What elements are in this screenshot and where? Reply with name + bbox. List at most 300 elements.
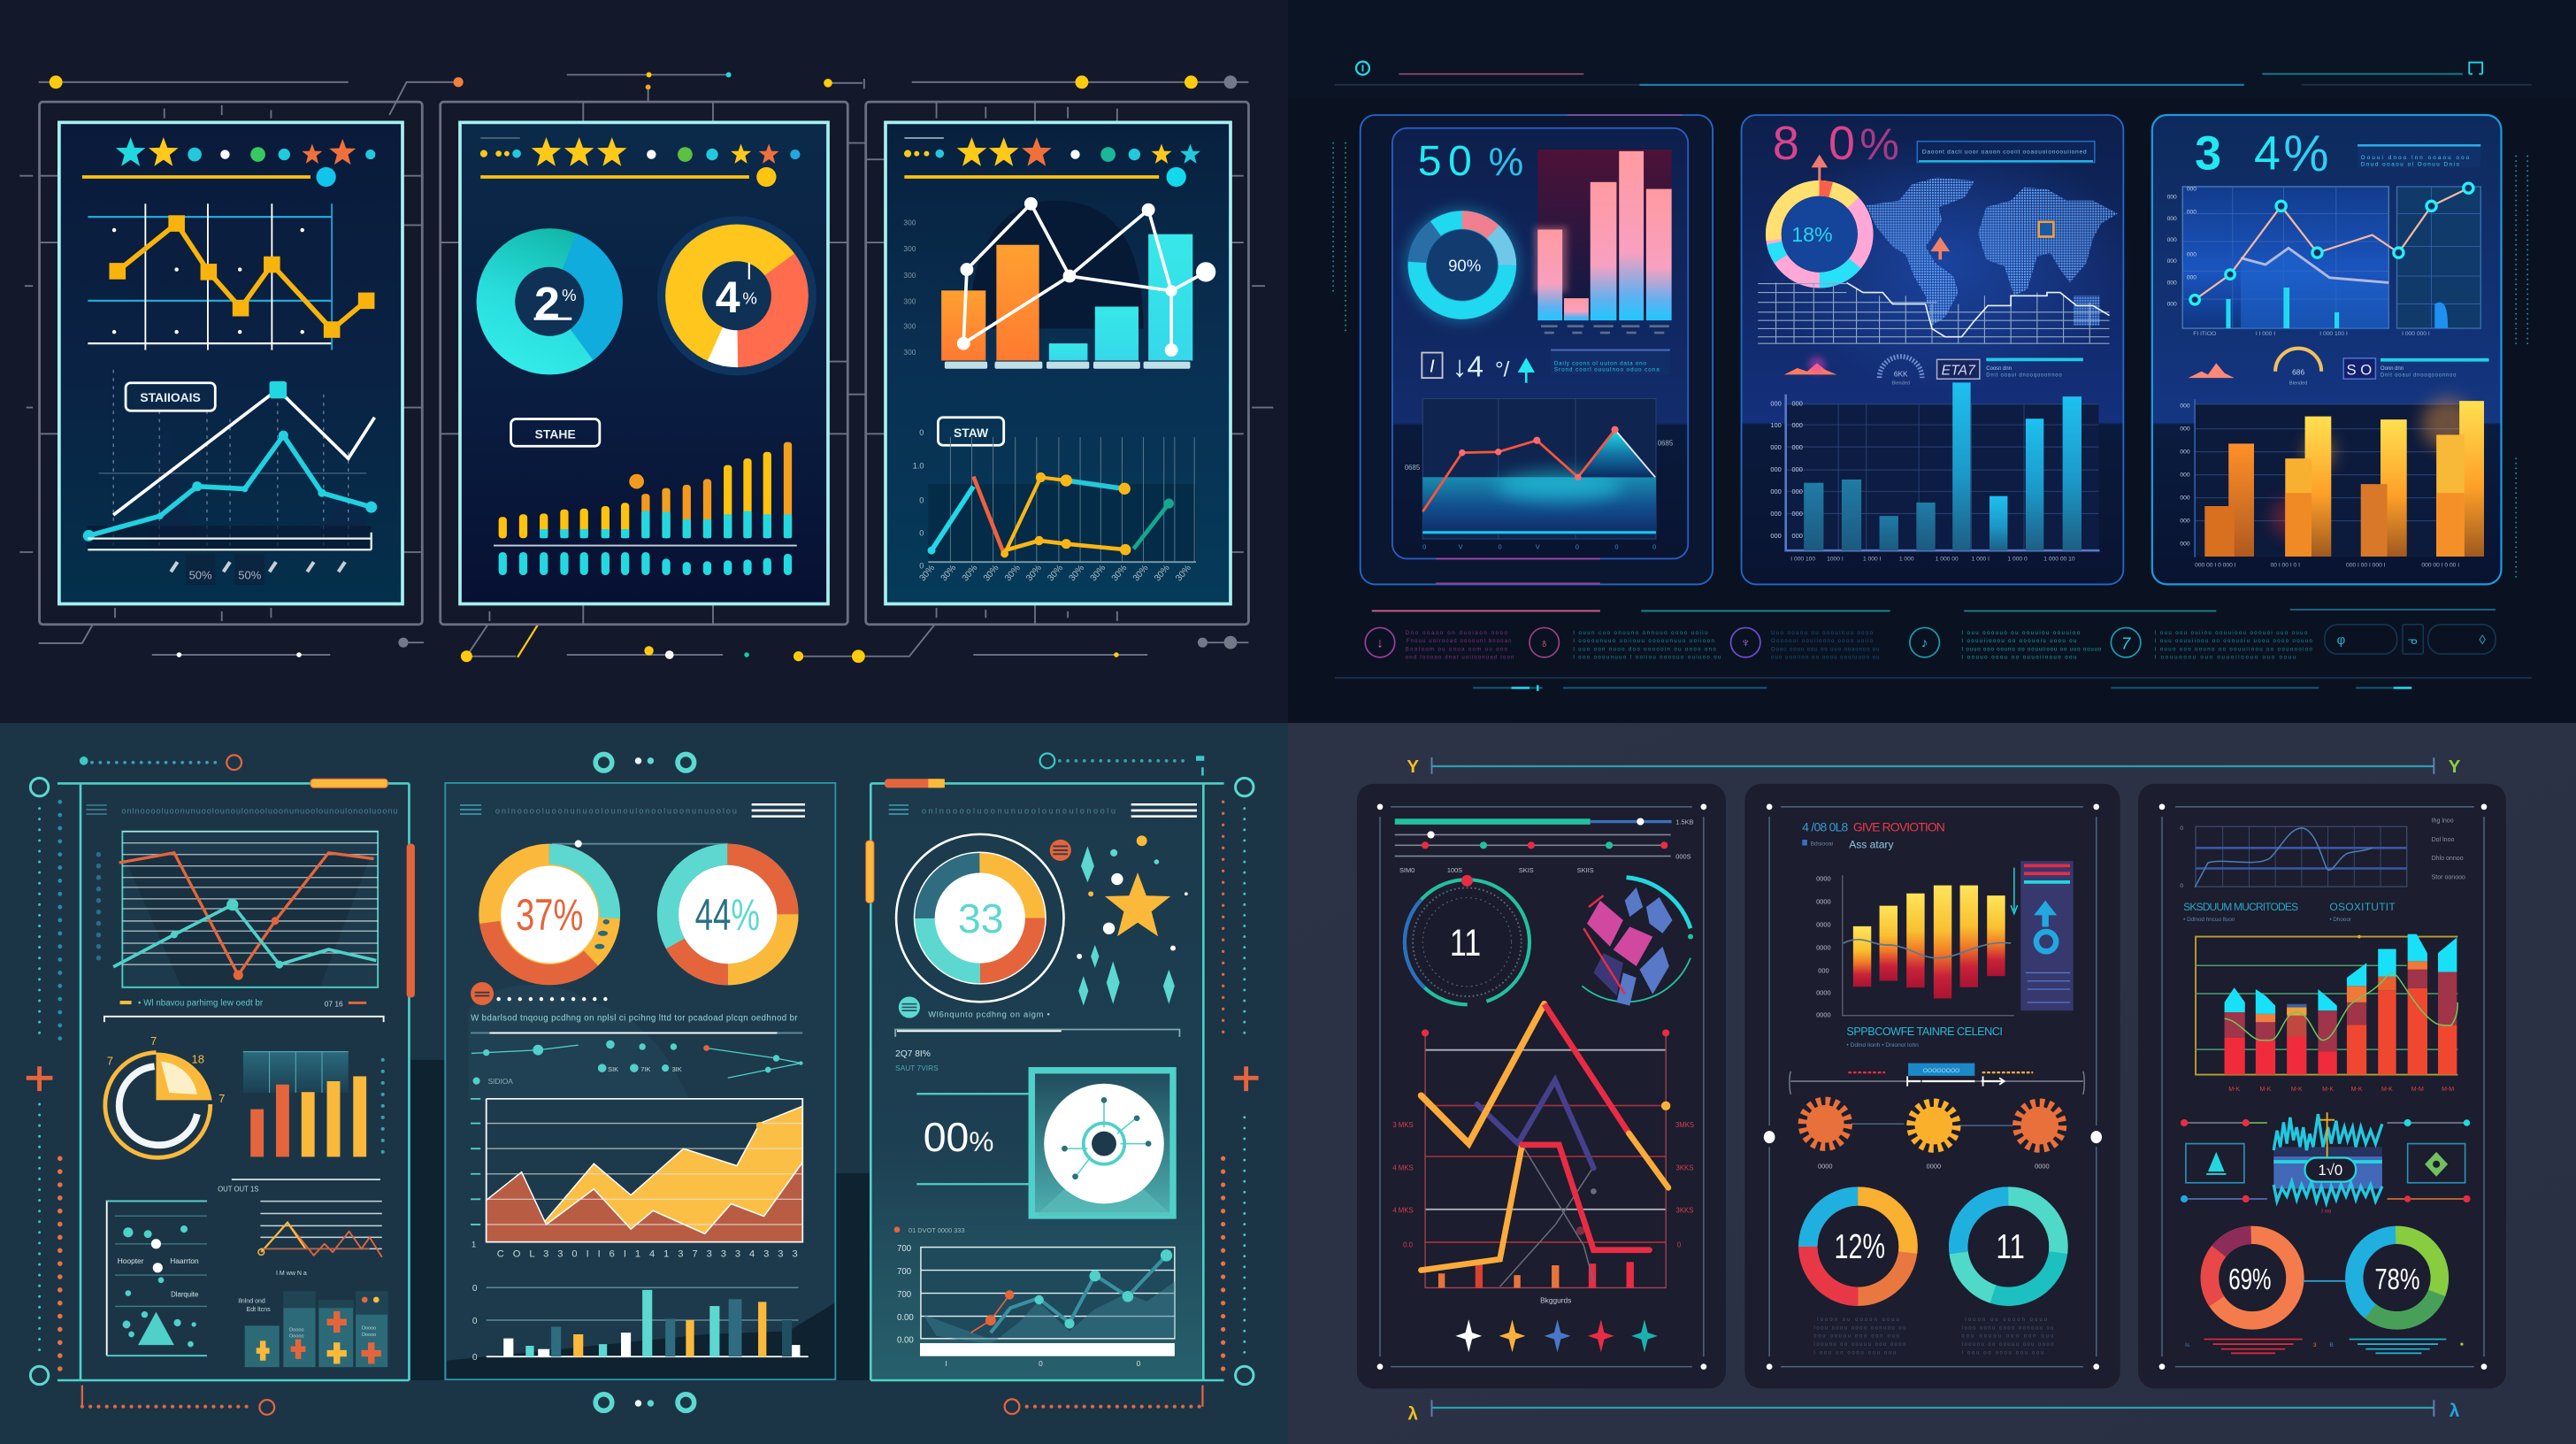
chart: donut 69% bbox=[2210, 1235, 2295, 1320]
panel: dial and big line chart bbox=[1357, 784, 1726, 1388]
title: Ass atary bbox=[1849, 838, 1893, 850]
top and bottom rules: Y bbox=[1407, 757, 1419, 777]
chart: small blue line: Ihg lnoo bbox=[2432, 818, 2454, 824]
stat captions: 2Q7 8I% bbox=[895, 1049, 931, 1059]
chart: hot bars: 0000 bbox=[1816, 943, 1831, 951]
panel: right donut, star and picture bbox=[866, 779, 1224, 1380]
chart: donut 44%: 44% bbox=[695, 890, 760, 940]
stat: 14% with arrow: °/ bbox=[1495, 357, 1510, 381]
chart: orange and yellow bars: 000 bbox=[2180, 495, 2190, 502]
stat: 00%: 00% bbox=[924, 1114, 993, 1160]
chart: red peak line: 0 bbox=[1422, 542, 1426, 550]
buttons: ◊ bbox=[2479, 634, 2486, 648]
chart: glowing node line: 000 bbox=[2187, 252, 2196, 258]
caption with icon bbox=[899, 996, 1050, 1019]
chart: blue bars: 000 bbox=[1792, 443, 1803, 451]
chart: blue bars: 000 bbox=[1792, 421, 1803, 429]
row: icons and label: 686 bbox=[2292, 367, 2304, 376]
diagram: dots and triangle bbox=[107, 1202, 207, 1356]
chart: cyan donut 2% bbox=[477, 228, 623, 374]
chart: multi-colour line chart: 1.0 bbox=[913, 461, 924, 470]
stat: 80%: % bbox=[1859, 119, 1899, 169]
top and bottom rules: Y bbox=[2449, 757, 2461, 777]
connector bbox=[552, 841, 728, 848]
footer: icons and captions bbox=[1335, 610, 2532, 691]
chart: yellow orange donut 4%: % bbox=[742, 289, 757, 308]
caption: OUT OUT 1S bbox=[218, 1185, 258, 1193]
icon: circle 3 bbox=[1730, 627, 1760, 657]
caption 4: I oouuo ooou oo ouuoiioouo oou bbox=[1961, 655, 2076, 661]
cards: plus icons: Ooooo bbox=[362, 1333, 376, 1338]
text block: Daily coons ol uuton data ono bbox=[1554, 360, 1646, 366]
caption 2: I ooo ooounuuo I ooiiou oooouo ouiuoo ou bbox=[1573, 655, 1721, 661]
panel: middle donuts and area chart bbox=[445, 783, 835, 1379]
label: STAIIOAIS bbox=[126, 383, 215, 411]
panel: 80% world map bbox=[1742, 115, 2134, 584]
caption 5: I ouu oou ouiiou oouuioou ooouoi uuo ouuo bbox=[2155, 630, 2308, 636]
chart: hot bars: 0000 bbox=[1816, 874, 1831, 882]
dotted side rails bbox=[1333, 143, 2527, 580]
chart: glowing donut 90%: 90% bbox=[1448, 256, 1481, 274]
chart: glowing node line: I 000 100 I bbox=[2319, 331, 2348, 337]
caption: • Wl nbavou parhimg lew oedt br bbox=[138, 999, 264, 1009]
chart: layered red and cyan bars: M-M bbox=[2442, 1087, 2454, 1093]
chart: blue bars: 1 000 0 bbox=[2007, 556, 2028, 562]
chart: large multi-line chart bbox=[1392, 1004, 1694, 1305]
panel: pie charts card bbox=[441, 102, 847, 625]
chart: lower line chart: 700 bbox=[897, 1290, 911, 1300]
caption 3: Uuo ooaou ou ooouinuu oooo bbox=[1771, 630, 1874, 636]
sliders: SIM0 bbox=[1399, 866, 1414, 874]
chart: red peak line: 0 bbox=[1652, 542, 1656, 550]
chart: donut 44% bbox=[668, 855, 788, 974]
chart: yellow orange donut 4% bbox=[657, 216, 816, 375]
chart: large multi-line chart: 3MKS bbox=[1675, 1121, 1694, 1129]
quadrant: dark navy dashboards bbox=[0, 0, 1288, 723]
chart: cyan donut 2%: 2 bbox=[534, 278, 560, 329]
quadrant: charcoal dashboards bbox=[1288, 723, 2576, 1444]
chart: lower line chart: 0 bbox=[1039, 1359, 1043, 1368]
text block: Dnud ooaou ol Oonuu Dnio bbox=[2361, 162, 2460, 168]
chart: bar chart: 0 bbox=[472, 1353, 478, 1363]
row: icons and label: Oonn dnn bbox=[2380, 366, 2404, 372]
top and bottom rules: λ bbox=[1407, 1405, 1418, 1425]
chart: multi-colour line chart: 30% bbox=[939, 564, 958, 583]
chart: blue bars: 000 bbox=[1770, 443, 1782, 451]
chart: large multi-line chart: 0.0 bbox=[1403, 1241, 1414, 1249]
chart: multi-colour line chart: 30% bbox=[1110, 564, 1129, 583]
text block bbox=[2358, 144, 2480, 168]
chart: pie gauge: 7 bbox=[107, 1054, 113, 1067]
row: icons and label: ETA7 bbox=[1942, 363, 1976, 378]
captions under donuts: Ioounu oo oouuu oou oooo bbox=[1961, 1342, 2054, 1348]
stat: 34%: 3 bbox=[2195, 127, 2221, 180]
icons: gears bbox=[1803, 1102, 2062, 1170]
caption: 07 16 bbox=[325, 999, 343, 1008]
chart: orange and yellow bars: 00 I 00 I 0 I bbox=[2271, 563, 2300, 569]
chart: glowing node line: 000 bbox=[2167, 216, 2177, 222]
icon: circle 5 bbox=[2111, 627, 2141, 657]
chart: layered red and cyan bars: M-K bbox=[2228, 1087, 2240, 1093]
header: onlnooooluoonunuoolounoulonooluoonunuoolounoulonooluoonu bbox=[121, 806, 397, 815]
chart: bars with white network line: 300 bbox=[903, 218, 916, 227]
chart: blue bars: 1 000 00 10 bbox=[2043, 556, 2075, 562]
stat: 80%: 0 bbox=[1828, 117, 1855, 170]
chart: blue bars: 000 bbox=[1770, 488, 1782, 495]
slider with button: OOOOOOOO bbox=[1923, 1068, 1959, 1074]
chart: glowing node line: 000 bbox=[2187, 186, 2196, 192]
stat: 80% bbox=[1773, 117, 1899, 170]
chart: red peak line: V bbox=[1536, 542, 1540, 550]
legend lines: Is bbox=[2185, 1342, 2190, 1348]
chart: layered red and cyan bars: M-K bbox=[2351, 1087, 2363, 1093]
dotted list marker bbox=[471, 982, 606, 1005]
chart: cyan donut 2%: % bbox=[562, 286, 577, 304]
chart: lower line chart: 0 bbox=[1137, 1359, 1141, 1368]
header: onlnooooluoonunuoolounoulonooluoonunuoolou bbox=[495, 806, 737, 815]
cards: plus icons: Ooooo bbox=[289, 1327, 304, 1333]
caption 2 bbox=[1573, 630, 1721, 661]
chart: large multi-line chart: 4 MKS bbox=[1392, 1164, 1414, 1171]
title: Bdsiooai bbox=[1811, 841, 1834, 847]
panel: 34% trend bbox=[2152, 115, 2501, 584]
chart: area chart bbox=[471, 1099, 802, 1260]
chart: glowing node line: 000 bbox=[2167, 195, 2177, 201]
stat captions: SAUT 7VIRS bbox=[895, 1064, 939, 1072]
network nodes: 7IK bbox=[640, 1065, 650, 1073]
panel: bars, gears and donuts bbox=[1744, 784, 2120, 1388]
chart: orange and yellow bars: 000 bbox=[2180, 518, 2190, 525]
diagram: dots and triangle: Dlarquite bbox=[171, 1290, 198, 1298]
map: dotted world map bbox=[1867, 178, 2118, 326]
icons: gears: 0000 bbox=[2035, 1162, 2050, 1170]
chart: orange and yellow bars: 000 bbox=[2180, 426, 2190, 433]
chart: small zigzag: I M ww N a bbox=[276, 1271, 307, 1277]
caption 3: Oooooui oouiioono oooo uoiio bbox=[1771, 638, 1874, 644]
chart: orange and yellow bars: 000 bbox=[2180, 403, 2190, 410]
stat: 34%: 4 bbox=[2254, 127, 2281, 180]
chart: orange and yellow bars bbox=[2180, 397, 2484, 569]
chart: lower line chart: 700 bbox=[897, 1267, 911, 1277]
chart: orange and yellow bars: 000 bbox=[2180, 472, 2190, 479]
chart: blue bars: 1 000 00 bbox=[1936, 556, 1959, 562]
stat: 50%: 50 bbox=[1418, 137, 1478, 185]
stat: 50% bbox=[1418, 137, 1523, 185]
quadrant: teal flat dashboards bbox=[0, 723, 1288, 1444]
cards: plus icons bbox=[238, 1292, 387, 1367]
chart: ring 18% bbox=[1774, 188, 1866, 280]
row: icons and label: S O bbox=[2346, 361, 2372, 378]
captions under donuts: oou oouuu ooo oon ouu bbox=[1961, 1334, 2053, 1340]
chart: red peak line: 0685 bbox=[1658, 439, 1673, 447]
title: • Dhooor bbox=[2329, 917, 2351, 923]
caption 5 bbox=[2155, 630, 2313, 661]
chart: multi-colour line chart: 0 bbox=[919, 528, 924, 537]
chart: blue bars bbox=[1770, 382, 2099, 562]
sliders bbox=[1395, 818, 1694, 874]
chart: blue bars: 000 bbox=[1792, 400, 1803, 408]
chart: multi-colour line chart: 30% bbox=[1174, 564, 1193, 583]
chart: small blue line: 0 bbox=[2180, 826, 2183, 832]
caption 3 bbox=[1771, 630, 1880, 661]
panel: left line, pie and small charts bbox=[58, 779, 415, 1380]
title: GIVE ROVIOTION bbox=[1853, 820, 1945, 834]
chart: red peak line: 0 bbox=[1499, 542, 1502, 550]
chart: glowing node line: 000 bbox=[2167, 301, 2177, 307]
chart: blue bars: 1 000 I bbox=[1863, 556, 1882, 562]
title bar: Daoont dacli uoor oaoon cooiit ooaouoionoouiioned bbox=[1922, 150, 2087, 156]
decorative connector nodes, bottom bbox=[39, 625, 1248, 663]
row: icons and label: Blended bbox=[1892, 381, 1910, 387]
caption 4: I ouu ooouuo ou oouuiou oouuioo bbox=[1961, 630, 2081, 636]
chart: small blue line: 0 bbox=[2180, 883, 2183, 889]
stat: 14% with arrow: ↓4 bbox=[1453, 350, 1484, 383]
chart: red peak line: V bbox=[1459, 542, 1463, 550]
chart: glowing node line: 000 bbox=[2167, 237, 2177, 243]
chart: bars with white network line: 300 bbox=[903, 244, 916, 253]
chart: yellow and cyan bars bbox=[494, 442, 797, 575]
chart: large multi-line chart: 3KKS bbox=[1676, 1164, 1693, 1171]
title bbox=[2183, 901, 2396, 923]
header bbox=[889, 804, 1197, 817]
icon row: stars and dots bbox=[82, 137, 375, 187]
buttons: ᓀ bbox=[2408, 634, 2418, 647]
row: icons and label: Coosn dnn bbox=[1986, 366, 2012, 372]
label: STAIIOAIS: STAIIOAIS bbox=[140, 390, 201, 404]
icon: circle 1 bbox=[1365, 627, 1395, 657]
stat: 14% with arrow bbox=[1422, 350, 1533, 383]
chart: ring 33: 33 bbox=[958, 895, 1004, 941]
title bar bbox=[1917, 142, 2095, 162]
chart: orange and yellow bars: 000 I 00 I 000 I bbox=[2346, 563, 2386, 569]
chart: small blue line: Dol lnoo bbox=[2432, 837, 2455, 843]
chart: blue bars: 000 bbox=[1770, 510, 1782, 518]
chart: red peak line: 0 bbox=[1576, 542, 1579, 550]
chart: lower line chart: 700 bbox=[897, 1244, 911, 1254]
chart: blue bars: 000 bbox=[1770, 465, 1782, 473]
chart: layered red and cyan bars: M-K bbox=[2381, 1087, 2393, 1093]
caption 4 bbox=[1961, 630, 2102, 661]
chart: orange and yellow bars: 000 00 I 0 000 I bbox=[2195, 563, 2236, 569]
stat: 14% with arrow: I bbox=[1430, 357, 1435, 377]
subtitle: • Ddlnd Ilonh • Dnionol Iohn bbox=[1846, 1042, 1919, 1048]
chart: lower line chart: I bbox=[946, 1359, 947, 1368]
chart: pie gauge: 7 bbox=[218, 1092, 225, 1105]
caption 1: Dno ooaou on duoiaon oooo bbox=[1406, 630, 1508, 636]
caption 4: I oouuiiooou oo ooouoiu uoou ou bbox=[1961, 638, 2076, 644]
icon row: stars and dots bbox=[904, 137, 1200, 187]
chart: multi-colour line chart: 0 bbox=[919, 428, 924, 437]
chart: multi-colour line chart: 30% bbox=[1003, 564, 1023, 583]
caption with icon: Wl6nqunto pcdhng on aigm • bbox=[928, 1010, 1050, 1019]
chart: bars with white network line bbox=[903, 197, 1215, 369]
legend lines bbox=[2185, 1340, 2464, 1353]
captions under donuts: Iooon ou oooon oouu bbox=[1817, 1317, 1899, 1323]
icon: circle 2 bbox=[1530, 627, 1559, 657]
chart: bar chart: 0 bbox=[472, 1284, 478, 1294]
cards: plus icons: Ooooo bbox=[362, 1325, 376, 1331]
chart: hot bars: 000 bbox=[1818, 966, 1829, 974]
chart: multi-colour line chart: 0 bbox=[919, 495, 924, 504]
icon: circle 3: ♆ bbox=[1741, 637, 1751, 651]
top and bottom rules bbox=[1407, 757, 2461, 1425]
labels: 50% badges: 50% bbox=[238, 569, 262, 582]
icon: circle 5: 7 bbox=[2121, 634, 2131, 653]
decorative rings and dotted rails bbox=[27, 753, 1259, 1415]
captions under donuts: Ioounu oo oouuu oou oooo bbox=[1813, 1342, 1906, 1348]
sliders: SKIS bbox=[1519, 866, 1534, 874]
label: STAHE: STAHE bbox=[535, 426, 576, 441]
title: SKSDUUM MUCRITODES bbox=[2183, 901, 2298, 913]
icon: circle 4 bbox=[1910, 627, 1939, 657]
chart: multi-colour line chart: 30% bbox=[961, 564, 979, 583]
network nodes: SIK bbox=[608, 1065, 618, 1073]
chart: blue bars: 000 bbox=[1792, 510, 1803, 518]
captions under donuts: Iooon ou oooon oouu bbox=[1965, 1317, 2047, 1323]
sliders: 100S bbox=[1447, 866, 1462, 874]
chart: glowing node line: I I 000 I bbox=[2256, 331, 2275, 337]
chart: bars with white network line: 300 bbox=[903, 297, 916, 306]
title: 4 /08 0L8 bbox=[1802, 820, 1849, 834]
caption: 01 DVOT 0000 333 bbox=[908, 1226, 965, 1234]
chart: glowing node line: FI ITIOO bbox=[2193, 331, 2216, 337]
chart: multi-colour line chart: 30% bbox=[1153, 564, 1172, 583]
chart: red peak line: 0 bbox=[1614, 542, 1618, 550]
panel: line charts card bbox=[40, 102, 422, 625]
chart: hot bars: 0000 bbox=[1816, 1011, 1831, 1019]
chart: bars with white network line: 300 bbox=[903, 348, 916, 357]
panel: combo charts card bbox=[866, 102, 1248, 625]
chart: blue bars: 000 bbox=[1770, 532, 1782, 540]
chart: orange and yellow bars bbox=[243, 1052, 383, 1156]
captions under donuts bbox=[1813, 1317, 2054, 1356]
diagram: dots and triangle: Hoopter bbox=[118, 1256, 144, 1265]
network nodes bbox=[472, 1041, 803, 1086]
chart: large multi-line chart: 3 MKS bbox=[1392, 1121, 1414, 1129]
chart: bar chart bbox=[472, 1284, 809, 1363]
chart: small blue line: Dhlo onnoo bbox=[2432, 856, 2464, 862]
panel: small line, layered bars and waveform bbox=[2138, 784, 2506, 1388]
network nodes: 3IK bbox=[672, 1065, 682, 1073]
caption 3: ouo uuoiino oo ooou oooiuuoo ou bbox=[1771, 655, 1880, 661]
graphic: mosaic globe bbox=[1582, 878, 1693, 1006]
chart: hot bars: 0000 bbox=[1816, 988, 1831, 996]
chart: yellow step line bbox=[88, 204, 374, 350]
legend lines: 3 bbox=[2313, 1342, 2317, 1348]
stat: 34%: % bbox=[2283, 126, 2329, 182]
top and bottom rules: λ bbox=[2450, 1402, 2460, 1421]
chart: donut 12%: 12% bbox=[1834, 1228, 1885, 1266]
chart: blue bars: 100 bbox=[1770, 421, 1782, 429]
chart: large multi-line chart: 3KKS bbox=[1676, 1207, 1693, 1215]
chart: dial 11 bbox=[1405, 875, 1530, 1004]
icon: star with diamonds bbox=[1050, 835, 1188, 1006]
cards: plus icons: Ooooo bbox=[289, 1334, 304, 1340]
decorative connector nodes, top bbox=[39, 73, 1248, 115]
slider with button bbox=[1790, 1064, 2084, 1095]
header: onlnooooluoonunuoolounoulonoolu bbox=[922, 806, 1116, 815]
title: OSOXITUTIT bbox=[2329, 901, 2396, 913]
icon: pink up arrow bbox=[1811, 155, 1828, 188]
chart: blue bars: I 000 100 bbox=[1790, 556, 1815, 562]
row: icons and label: 6KK bbox=[1894, 369, 1908, 378]
chart: donut 12% bbox=[1808, 1196, 1908, 1296]
caption 1: ond Ioooao dnat uoiioonuad toon bbox=[1406, 655, 1514, 661]
row: icons and label bbox=[2189, 349, 2489, 387]
labels: 50% badges bbox=[171, 554, 345, 585]
chart: orange and yellow bars: 000 bbox=[2180, 542, 2190, 548]
captions under donuts: Ioou oonu oooo oonoou ou bbox=[1813, 1325, 1905, 1331]
subtitle bbox=[1846, 1025, 2003, 1048]
chart: small zigzag bbox=[258, 1202, 382, 1277]
chart: multi-colour line chart: 30% bbox=[1089, 564, 1108, 583]
chart: pie gauge bbox=[105, 1034, 225, 1157]
stat: 00% bbox=[916, 1094, 1029, 1184]
chart: donut 37% bbox=[489, 855, 610, 974]
chart: pie gauge: 7 bbox=[150, 1034, 157, 1048]
caption bbox=[120, 999, 366, 1009]
chart: multi-colour line chart: 30% bbox=[1131, 564, 1151, 583]
chart: multi-colour line chart: 30% bbox=[1024, 564, 1044, 583]
title: • Ddlnod hncuo ltuon bbox=[2183, 917, 2235, 923]
label: STAW: STAW bbox=[954, 426, 989, 440]
network nodes: SIDIOA bbox=[488, 1077, 513, 1086]
chart: white and cyan lines with label bbox=[83, 370, 377, 585]
icons: gears: 0000 bbox=[1818, 1162, 1833, 1170]
chart: large multi-line chart: 0 bbox=[1677, 1241, 1682, 1249]
chart: blue bars: 1000 I bbox=[1827, 556, 1844, 562]
chart: ring 18%: 18% bbox=[1791, 223, 1833, 246]
chart: glowing node line: 000 bbox=[2187, 209, 2196, 215]
chart: hot bars bbox=[1816, 868, 2018, 1019]
stat: 50%: % bbox=[1489, 141, 1523, 184]
captions under donuts: I oou oo ooou oou oou bbox=[1961, 1350, 2043, 1356]
widget: waveform with connectors: I oo bbox=[2321, 1209, 2332, 1215]
icon: circle 1: ↓ bbox=[1376, 637, 1384, 651]
icon: circle 2: ♁ bbox=[1539, 637, 1549, 651]
side card: arrow and ring bbox=[2020, 861, 2074, 1010]
chart: glowing node line: 000 bbox=[2187, 275, 2196, 281]
chart: glowing node line: 000 bbox=[2167, 280, 2177, 286]
caption 4: I ouuo ooo oouno oo oouuiioou oo uuo oouuo bbox=[1961, 646, 2102, 652]
buttons: φ bbox=[2337, 634, 2345, 648]
chart: pink bars bbox=[1535, 150, 1672, 333]
chart: blue bars: 1 000 bbox=[1899, 556, 1914, 562]
chart: red peak line: 0685 bbox=[1405, 464, 1420, 472]
chart: donut 78%: 78% bbox=[2374, 1264, 2420, 1296]
stat captions bbox=[895, 1049, 939, 1072]
row: icons and label: Dnit ooaui dnooqooonnoo bbox=[2380, 373, 2457, 378]
caption 3: Oooo ooou oou oo uuo ooaonoo ou bbox=[1771, 646, 1880, 652]
labels: 50% badges: 50% bbox=[189, 569, 212, 582]
caption 5: I ouu oouuiioou oo ooouoiu uoou oooo oouuo bbox=[2155, 638, 2313, 644]
header lines and icons bbox=[1335, 62, 2532, 85]
quadrant: neon blue dashboards bbox=[1288, 0, 2576, 723]
chart: small blue line: Stor oonooo bbox=[2432, 875, 2465, 881]
diagram: dots and triangle: Haarrton bbox=[170, 1256, 199, 1265]
chart: layered red and cyan bars bbox=[2196, 934, 2457, 1093]
chart: dial 11: 11 bbox=[1450, 922, 1481, 964]
chart: red peak line bbox=[1405, 399, 1673, 550]
chart: bars with white network line: 300 bbox=[903, 321, 916, 330]
caption 5: I ouuo ooo oouno oo oouuiioou oo oouoooioo bbox=[2155, 646, 2313, 652]
chart: hot bars: 0000 bbox=[1816, 897, 1831, 905]
buttons bbox=[2325, 625, 2496, 654]
row: icons and label: Blended bbox=[2289, 381, 2307, 387]
header bbox=[460, 804, 805, 817]
caption 2: I uuo oon ouoo doo oooooin ou oooo ono bbox=[1573, 646, 1716, 652]
chart: donut 11 bbox=[1959, 1196, 2058, 1296]
